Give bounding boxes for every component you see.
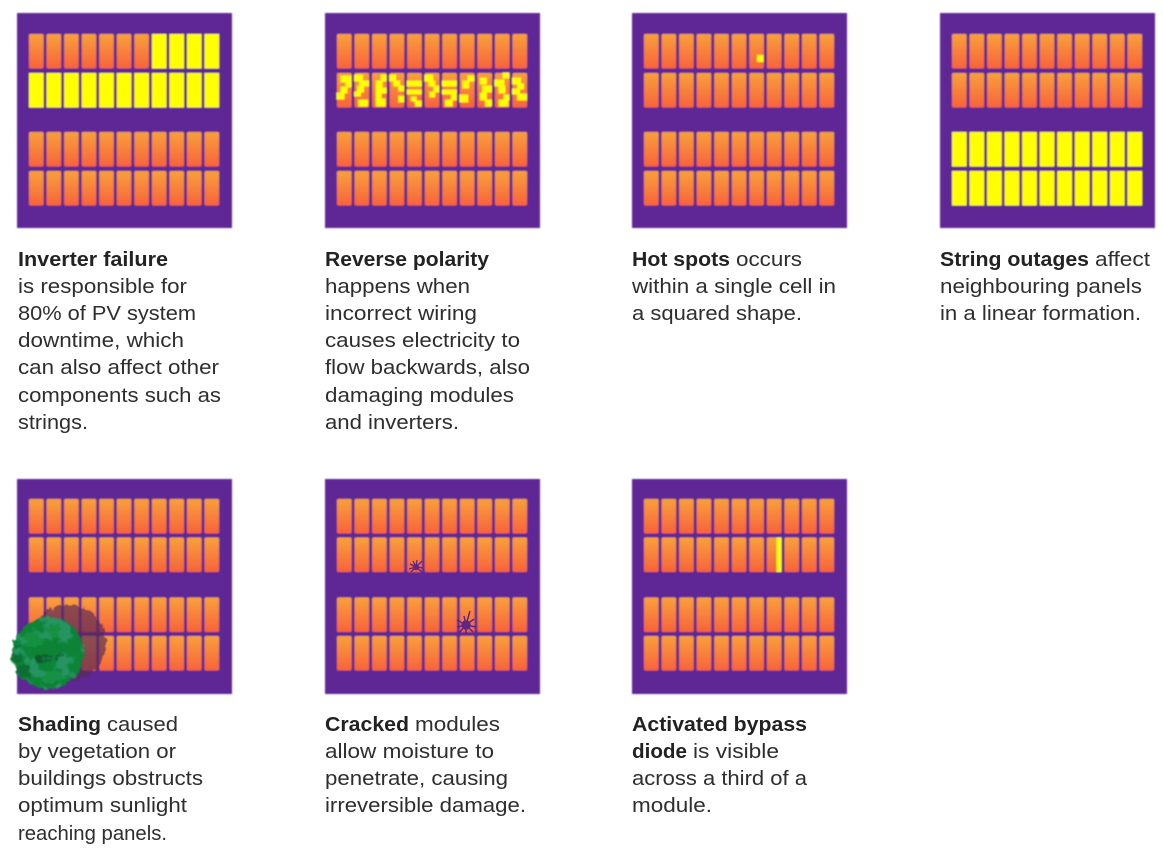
text: hot spots: Hot spots [632, 248, 730, 271]
text: hot spots: occurs [736, 248, 802, 271]
panel: activated bypass diode thermal image [632, 479, 847, 694]
panel: string outages thermal image [940, 13, 1155, 228]
text: cracked: penetrate, causing [325, 767, 508, 790]
text: reverse polarity: damaging modules [325, 384, 514, 407]
text: reverse polarity: happens when [325, 275, 470, 298]
icon: small crack [409, 560, 423, 572]
text: shading: Shading [18, 713, 101, 736]
text: cracked: irreversible damage. [325, 794, 526, 817]
text: cracked: modules [415, 713, 500, 736]
panel: shading thermal image [11, 479, 232, 694]
text: string outages: in a linear formation. [940, 302, 1141, 325]
text: shading: by vegetation or [18, 740, 176, 763]
text: activated bypass diode: module. [632, 794, 712, 817]
text: activated bypass diode: is visible [693, 740, 779, 763]
icon: tree [11, 617, 84, 689]
text: string outages: String outages [940, 248, 1089, 271]
panel: inverter failure thermal image [17, 13, 232, 228]
text: inverter failure: components such as [18, 384, 221, 407]
text: cracked: Cracked [325, 713, 409, 736]
text: hot spots: within a single cell in [631, 275, 836, 298]
text: activated bypass diode: across a third of a [632, 767, 808, 790]
text: shading: buildings obstructs [18, 767, 203, 790]
text: inverter failure: strings. [18, 411, 88, 434]
text: reverse polarity: causes electricity to [325, 329, 520, 352]
text: string outages [940, 248, 1150, 325]
panel: reverse polarity thermal image [325, 13, 540, 228]
text: reverse polarity: flow backwards, also [325, 356, 530, 379]
text: inverter failure: 80% of PV system [18, 302, 196, 325]
icon: bypass diode strip [776, 538, 782, 572]
text: inverter failure: is responsible for [18, 275, 187, 298]
text: inverter failure: Inverter failure [18, 248, 168, 271]
panel: hot spots thermal image [632, 13, 847, 228]
text: activated bypass diode [632, 713, 808, 817]
text: hot spots: a squared shape. [632, 302, 802, 325]
text: cracked [325, 713, 526, 817]
text: inverter failure: downtime, which [18, 329, 184, 352]
text: reverse polarity [325, 248, 530, 434]
text: reverse polarity: and inverters. [325, 411, 459, 434]
text: cracked: allow moisture to [325, 740, 494, 763]
panel: cracked modules thermal image [325, 479, 540, 694]
icon: tree shadow [30, 605, 106, 681]
text: activated bypass diode: Activated bypass [632, 713, 807, 736]
text: inverter failure [18, 248, 221, 434]
text: string outages: affect [1095, 248, 1150, 271]
icon: large crack [457, 611, 476, 634]
text: shading: caused [107, 713, 178, 736]
text: shading [18, 713, 203, 845]
text: hot spots [631, 248, 836, 325]
text: reverse polarity: incorrect wiring [325, 302, 477, 325]
text: activated bypass diode: diode [632, 740, 687, 763]
text: shading: optimum sunlight [18, 794, 187, 817]
text: inverter failure: can also affect other [18, 356, 219, 379]
text: shading: reaching panels. [18, 822, 167, 845]
text: string outages: neighbouring panels [940, 275, 1142, 298]
icon: hot spot square [757, 55, 764, 62]
text: reverse polarity: Reverse polarity [325, 248, 490, 271]
